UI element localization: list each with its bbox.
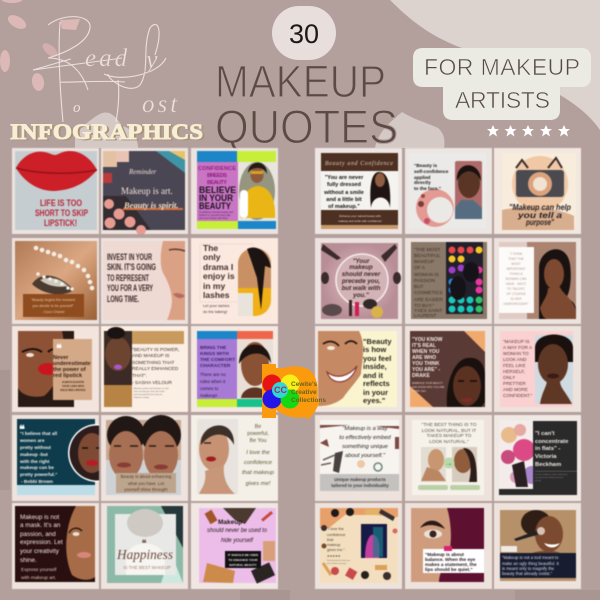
heading: Ready To Post script title: y bbox=[143, 45, 158, 74]
card: the best thing is to look natural: LOOK NATURAL." bbox=[429, 439, 469, 445]
card: believe in your beauty: Confidence breeds beauty and bbox=[199, 211, 234, 214]
card: pretty without makeup Bobbi Brown: women are bbox=[19, 438, 45, 443]
card: beauty is about enhancing what you have: what you have. Let bbox=[128, 481, 165, 486]
card: makeup should never be used to hide yourself: TO ENHANCE YOUR bbox=[228, 558, 258, 562]
card: you know it's real Drake: DRAKE bbox=[412, 373, 430, 379]
card: never underestimate the power of red lipstick: ALWAYS ELEVATE bbox=[62, 381, 84, 384]
card: beauty is how you feel inside: eyes." bbox=[363, 396, 386, 405]
card: makeup can help you tell a story: "Makeup can help bbox=[509, 203, 571, 212]
card: the best thing is to look natural: "THE BEST THING IS TO bbox=[422, 422, 477, 428]
card: invest in your skin: YOU FOR A VERY bbox=[107, 283, 153, 293]
card: beauty is how you feel inside: reflects bbox=[363, 379, 390, 388]
card: beauty is power: SOMETHING THAT bbox=[132, 360, 175, 366]
card: beauty and confidence: and a little bit bbox=[326, 197, 362, 203]
heading: INFOGRAPHICS: INFOGRAPHICS bbox=[10, 119, 203, 144]
card: I can't concentrate in flats Victoria Beckham bbox=[494, 414, 582, 502]
card: beauty is about enhancing what you have: Beauty is about enhancing bbox=[121, 474, 172, 479]
card: makeup is not a mask: expression. Let bbox=[20, 539, 63, 546]
card: makeup is a way for a woman: CONFIDENT." bbox=[503, 393, 533, 398]
card: beauty is how you feel inside: is how bbox=[363, 345, 387, 354]
card: bring the kings with the comfort of character: KINGS WITH bbox=[200, 351, 229, 357]
card: the best thing is to look natural: → bbox=[446, 460, 452, 468]
watermark logo: creative collections: Creative bbox=[291, 389, 317, 396]
card: beauty is how you feel inside: inside, bbox=[363, 362, 387, 371]
card: makeup is a way for a woman: HERSELF, bbox=[503, 369, 525, 374]
card: never underestimate the power of red lipstick: red lipstick bbox=[53, 373, 83, 379]
card: pretty without makeup Bobbi Brown: ❝ bbox=[19, 424, 25, 436]
card: the most beautiful makeup is passion: PASSION bbox=[414, 278, 436, 284]
card: your makeup should never precede you: but walk with bbox=[342, 285, 381, 292]
card: the most beautiful makeup is passion: BEAUTIFUL bbox=[414, 253, 441, 259]
card: believe in your beauty: BEAUTY bbox=[199, 201, 232, 212]
card: makeup is art: Beauty is spirit. bbox=[123, 200, 179, 210]
badge: 30 bbox=[272, 6, 336, 60]
card: beauty and confidence: makeup and smile with confidence! bbox=[338, 219, 382, 223]
card: makeup should never be used to hide yourself: IT SHOULD BE USED bbox=[228, 553, 259, 557]
card: the most beautiful makeup is passion: ARE EASIER bbox=[414, 297, 443, 303]
card: the most beautiful makeup is passion: MAKEUP bbox=[414, 259, 434, 265]
card: pretty without makeup Bobbi Brown: pretty powerful." bbox=[20, 472, 57, 477]
card: makeup is a way for a woman: A WAY FOR A bbox=[503, 345, 533, 350]
card: makeup can help you tell a story bbox=[494, 148, 582, 234]
card: woman with white quote panel: "I THINK bbox=[510, 252, 523, 256]
card: invest in your skin: INVEST IN YOUR bbox=[107, 252, 152, 262]
card: makeup is not a mask: shine. bbox=[20, 557, 37, 564]
card: happiness is the best makeup: ❝ bbox=[142, 538, 147, 548]
card: never underestimate the power of red lipstick: BOLD RED LIPSTICK bbox=[60, 389, 86, 392]
card: woman with white quote panel: HAVE - NEXT bbox=[506, 282, 526, 286]
card: beauty and confidence: Enhance your natural beauty with bbox=[339, 214, 381, 218]
card: the only drama I enjoy: Let your lashes bbox=[203, 303, 229, 308]
card: makeup is not a tool: "Makeup is not a tool meant to bbox=[502, 555, 559, 560]
card: bring the kings with the comfort of character: CHARACTER bbox=[200, 363, 231, 369]
card: beauty and confidence: without a smile bbox=[323, 190, 364, 196]
card: makeup is a way to effectively embed something unique: Unique makeup products bbox=[334, 477, 386, 482]
card: the most beautiful makeup is passion: LAURENT bbox=[414, 313, 436, 319]
card: beauty begins the moment: "Beauty begins the moment bbox=[31, 298, 75, 302]
card: makeup is a way for a woman: AND MORE bbox=[503, 387, 528, 392]
card: woman with white quote panel: THING A bbox=[509, 272, 523, 276]
card: you know it's real Drake: YOU ARE" - bbox=[412, 367, 440, 373]
card: I can't concentrate in flats Victoria Beckham: Let the confidence show and let your bbox=[535, 473, 568, 476]
card: I can't concentrate in flats Victoria Beckham: in flats" - bbox=[535, 446, 560, 452]
card: bring the kings with the comfort of character: comes to bbox=[200, 386, 219, 391]
card: you know it's real Drake: "YOU KNOW bbox=[412, 337, 443, 343]
card: you know it's real Drake: YOU THINK bbox=[412, 361, 440, 367]
card: you know it's real Drake: AND KNOW WHO YOU ARE bbox=[412, 386, 445, 389]
card: believe in your beauty: IN YOUR bbox=[199, 193, 233, 204]
card: makeup is not a tool: make an ugly thing beautiful. It bbox=[502, 561, 560, 566]
card: makeup is not a tool: is meant only to magnify the bbox=[502, 566, 555, 571]
card: be powerful, be you: I love the bbox=[246, 450, 271, 456]
card: the only drama I enjoy bbox=[190, 238, 278, 324]
card: makeup is a way to effectively embed something unique bbox=[314, 414, 402, 502]
card: beauty is self-confidence: to the face." bbox=[414, 186, 441, 191]
card: beauty and confidence: of makeup." bbox=[328, 204, 360, 210]
heading: INFOGRAPHICS: INFOGRAPHICS bbox=[12, 120, 205, 145]
card: life is too short to skip lipstick: LIPSTICK! bbox=[44, 218, 77, 228]
card: believe in your beauty: CONFIDENCE bbox=[198, 166, 236, 172]
card: the most beautiful makeup is passion bbox=[404, 238, 492, 324]
card: beauty is self-confidence: directly bbox=[414, 180, 431, 185]
card: believe in your beauty: and your beauty will shine bbox=[199, 217, 228, 220]
heading: Ready To Post script title bbox=[10, 16, 205, 145]
card: beauty begins the moment bbox=[12, 238, 100, 324]
card: I can't concentrate in flats Victoria Beckham: you go. bbox=[535, 480, 542, 482]
card: beauty is how you feel inside: you feel bbox=[363, 354, 391, 363]
watermark logo: creative collections: Collections bbox=[291, 397, 326, 404]
card: happiness is the best makeup: Happiness bbox=[116, 548, 174, 563]
card: I love the confidence: "I love the bbox=[327, 527, 344, 531]
card: beauty is power: - SASHA VELOUR bbox=[132, 380, 173, 386]
card: makeup is about balance: lips should be quiet." bbox=[425, 567, 473, 572]
card: you know it's real Drake: EMBRACE YOUR BEAUTY bbox=[412, 382, 443, 385]
card: never underestimate the power of red lipstick: ❝ bbox=[56, 343, 62, 355]
card: beauty is how you feel inside bbox=[314, 326, 402, 412]
card: you know it's real Drake: EVERY DAY. bbox=[412, 390, 427, 393]
watermark logo: creative collections bbox=[262, 364, 326, 420]
card: bring the kings with the comfort of character: makeup! bbox=[200, 393, 217, 398]
badge: 30: 30 bbox=[289, 19, 319, 49]
card: the most beautiful makeup is passion: OF A bbox=[414, 265, 426, 271]
card: be powerful, be you: powerful, bbox=[247, 431, 269, 437]
card: makeup is art: Makeup is art. bbox=[121, 186, 173, 196]
card: happiness is the best makeup bbox=[100, 502, 188, 590]
label: For Makeup Artists: FOR MAKEUP bbox=[424, 54, 580, 80]
card: never underestimate the power of red lipstick: the power of bbox=[53, 367, 86, 373]
card: pretty without makeup Bobbi Brown bbox=[12, 414, 100, 502]
card: pretty without makeup Bobbi Brown: makeup -but bbox=[20, 452, 48, 457]
card: makeup is a way for a woman: "MAKEUP IS bbox=[503, 339, 530, 344]
card: the best thing is to look natural: TAKES MAKEUP TO bbox=[427, 433, 472, 439]
card: makeup is not a mask bbox=[12, 502, 100, 590]
heading: Ready To Post script title: ead bbox=[85, 45, 130, 72]
card: I love the confidence: makeup bbox=[327, 543, 341, 547]
card: beauty is power: AND MAKEUP IS bbox=[132, 353, 170, 359]
card: be powerful, be you: gives me! bbox=[246, 481, 271, 487]
card: the only drama I enjoy: in my bbox=[203, 281, 225, 291]
card: the most beautiful makeup is passion: YVES SAINT bbox=[414, 308, 442, 314]
card: pretty without makeup Bobbi Brown: makeup can be bbox=[20, 465, 54, 470]
card: the only drama I enjoy: drama I bbox=[203, 262, 233, 272]
card: bring the kings with the comfort of character: There are no bbox=[200, 372, 226, 377]
card: makeup is a way to effectively embed something unique: something unique bbox=[342, 444, 389, 450]
card: beauty and confidence: fully dressed bbox=[327, 182, 361, 188]
card: beauty is about enhancing what you have bbox=[100, 414, 188, 502]
card: invest in your skin bbox=[100, 238, 188, 324]
card: you know it's real Drake bbox=[404, 326, 492, 412]
card: makeup is not a tool bbox=[494, 502, 582, 590]
card: beauty is power: THAT". bbox=[132, 373, 147, 379]
card: believe in your beauty: BREEDS bbox=[207, 173, 227, 179]
card: beauty is power: "BEAUTY IS POWER, bbox=[132, 347, 179, 353]
card: woman with white quote panel: OF COURSE bbox=[506, 292, 527, 296]
card: makeup is a way for a woman bbox=[494, 326, 582, 412]
card: bring the kings with the comfort of character: THE COMFORT bbox=[200, 357, 235, 363]
heading: MAKEUP QUOTES bbox=[215, 56, 398, 150]
card: makeup is a way for a woman: ONLY bbox=[503, 375, 515, 380]
card: beauty is about enhancing what you have: yourself shine through! bbox=[124, 487, 168, 492]
card: I love the confidence bbox=[314, 502, 402, 590]
card: beauty is power: Beauty is power and makeup is a tool bbox=[134, 387, 169, 390]
card: beauty and confidence: Beauty and Confidence bbox=[325, 160, 393, 167]
card: the most beautiful makeup is passion: "THE MOST bbox=[414, 247, 441, 253]
card: I can't concentrate in flats Victoria Beckham: "I can't bbox=[535, 431, 555, 437]
card: beauty is power: Embrace it daily. bbox=[134, 396, 150, 399]
card: woman with white quote panel: TO TALENT, bbox=[507, 287, 525, 291]
card: the only drama I enjoy: only bbox=[203, 252, 221, 262]
card: makeup is a way for a woman: FEEL LIKE bbox=[503, 363, 526, 368]
card: be powerful, be you bbox=[190, 414, 278, 502]
card: makeup is not a mask: Express yourself bbox=[21, 567, 57, 573]
heading: MAKEUP QUOTES: MAKEUP bbox=[215, 56, 386, 107]
card: makeup is a way for a woman: LOOK AND bbox=[503, 357, 527, 362]
heading: Ready To Post script title: ost bbox=[142, 91, 180, 118]
card: the most beautiful makeup is passion: COSMETICS bbox=[414, 290, 443, 296]
card: the most beautiful makeup is passion: WOMAN IS bbox=[414, 272, 439, 278]
heading: Ready To Post script title: o bbox=[73, 100, 81, 116]
card: I love the confidence: confidence bbox=[327, 533, 345, 537]
card: makeup is a way to effectively embed something unique: to effectively embed bbox=[339, 435, 392, 441]
watermark logo: creative collections: CC bbox=[274, 385, 287, 395]
card: the only drama I enjoy: do the talking! bbox=[203, 309, 227, 314]
card: believe in your beauty: believe in yourself every day bbox=[199, 214, 231, 217]
card: woman with white quote panel: IMPORTANT bbox=[506, 267, 526, 271]
card: the best thing is to look natural: LOOK NATURAL, BUT IT bbox=[422, 428, 476, 434]
card: I love the confidence: that bbox=[327, 538, 334, 542]
card: beauty and confidence: "You are never bbox=[325, 175, 364, 181]
card: you know it's real Drake: ARE WHO bbox=[412, 355, 436, 361]
card: your makeup should never precede you bbox=[314, 238, 402, 324]
card: be powerful, be you: Be You bbox=[250, 438, 266, 444]
card: invest in your skin: LONG TIME. bbox=[107, 294, 139, 304]
card: makeup can help you tell a story: you tell a bbox=[517, 211, 563, 220]
card: beauty and confidence bbox=[314, 148, 402, 234]
card: pretty without makeup Bobbi Brown: "I believe that all bbox=[20, 431, 57, 436]
card: makeup should never be used to hide yourself bbox=[190, 502, 278, 590]
card: woman with white quote panel: THAT THE bbox=[508, 257, 525, 261]
card: the only drama I enjoy: lashes bbox=[203, 290, 230, 300]
card: your makeup should never precede you: precede you, bbox=[341, 278, 380, 285]
card: be powerful, be you: that makeup bbox=[242, 470, 275, 476]
card: beauty is self-confidence: applied bbox=[414, 175, 431, 180]
card: your makeup should never precede you: should never bbox=[342, 271, 381, 278]
card: beauty begins the moment: you decide to be yourself" bbox=[32, 304, 74, 308]
card: bring the kings with the comfort of character bbox=[190, 326, 278, 412]
card: I love the confidence: ★★★★★ bbox=[327, 554, 341, 558]
card: bring the kings with the comfort of character: BRING THE bbox=[200, 345, 227, 351]
card: be powerful, be you: Be bbox=[255, 424, 261, 430]
card: never underestimate the power of red lipstick: underestimate bbox=[53, 361, 91, 367]
card: makeup is about balance: "Makeup is about bbox=[425, 552, 464, 557]
card: makeup is a way for a woman: PRETTIER bbox=[503, 381, 526, 386]
card: I love the confidence: feel confident every day. bbox=[327, 562, 347, 565]
card: woman with white quote panel: WOMAN CAN bbox=[506, 277, 527, 281]
card: pretty without makeup Bobbi Brown: with the right bbox=[19, 459, 50, 464]
card: the only drama I enjoy: The bbox=[203, 243, 218, 253]
card: life is too short to skip lipstick: LIFE IS TOO bbox=[40, 198, 82, 208]
card: beauty is power: just how powerful you truly are. bbox=[133, 393, 163, 396]
card: makeup is about balance: makes a statement, the bbox=[425, 562, 477, 567]
card: I can't concentrate in flats Victoria Beckham: Beckham bbox=[535, 462, 561, 468]
card: woman with white quote panel: MOST bbox=[511, 262, 521, 266]
card: makeup is about balance bbox=[404, 502, 492, 590]
card: makeup is not a mask: passion, and bbox=[20, 531, 56, 538]
card: the best thing is to look natural bbox=[404, 414, 492, 502]
watermark logo: creative collections: Cewite's bbox=[291, 381, 317, 388]
card: beauty begins the moment: - Coco Chanel bbox=[42, 310, 65, 314]
card: you know it's real Drake: IT'S REAL bbox=[412, 343, 436, 349]
card: the only drama I enjoy: enjoy is bbox=[203, 271, 235, 281]
card: believe in your beauty: BELIEVE bbox=[199, 185, 236, 196]
card: makeup is art: Reminder bbox=[128, 168, 156, 176]
card: your makeup should never precede you: "Your bbox=[353, 258, 370, 265]
card: makeup is a way to effectively embed something unique: "Makeup is a way bbox=[342, 426, 389, 432]
icon: five star rating bbox=[487, 125, 570, 136]
card: beauty is how you feel inside: "Beauty bbox=[363, 337, 392, 346]
card: happiness is the best makeup: IS THE BEST MAKEUP bbox=[123, 565, 171, 570]
label: For Makeup Artists bbox=[413, 48, 591, 120]
card: I love the confidence: Find makeup that makes you bbox=[327, 559, 350, 562]
card: beauty is power: that can help you show the world bbox=[134, 390, 165, 393]
card: beauty is how you feel inside: and it bbox=[363, 371, 384, 380]
card: makeup is a way to effectively embed something unique: tailored to your individuality bbox=[331, 483, 389, 488]
card: makeup should never be used to hide yourself: should never be used to bbox=[207, 527, 267, 534]
card: woman with white quote panel: HAIRDRESSER" bbox=[504, 302, 529, 306]
card: the most beautiful makeup is passion: TO BUY." bbox=[414, 303, 434, 309]
card: believe in your beauty: BEAUTY bbox=[207, 180, 227, 186]
card: makeup should never be used to hide yourself: hide yourself bbox=[221, 537, 254, 544]
card: your makeup should never precede you: you." bbox=[352, 292, 369, 299]
card: never underestimate the power of red lipstick: YOUR LOOK WITH bbox=[62, 385, 84, 388]
card: beauty is self-confidence: self-confidence bbox=[414, 169, 449, 174]
card: makeup is a way to effectively embed something unique: about yourself." bbox=[345, 453, 386, 459]
card: beauty is how you feel inside: in your bbox=[363, 388, 388, 397]
card: I love the confidence: gives me." bbox=[327, 548, 345, 552]
card: makeup is not a mask: your creativity bbox=[20, 548, 60, 555]
card: beauty is self-confidence bbox=[404, 148, 492, 234]
card: beauty is power: REALLY ENHANCED bbox=[132, 366, 179, 372]
card: never underestimate the power of red lipstick: Never bbox=[53, 355, 69, 361]
card: beauty is power bbox=[100, 326, 188, 412]
card: life is too short to skip lipstick bbox=[12, 148, 100, 234]
card: pretty without makeup Bobbi Brown: - Bobbi Brown bbox=[21, 479, 53, 484]
card: I can't concentrate in flats Victoria Beckham: makeup do the talking wherever bbox=[535, 476, 564, 479]
card: be powerful, be you: confidence bbox=[244, 460, 273, 466]
card: you know it's real Drake: WHEN YOU bbox=[412, 349, 440, 355]
label: For Makeup Artists: ARTISTS bbox=[455, 87, 550, 113]
card: makeup is art bbox=[100, 148, 188, 234]
card: makeup is not a mask: Makeup is not bbox=[20, 514, 59, 521]
card: I can't concentrate in flats Victoria Beckham: Victoria bbox=[535, 454, 557, 460]
card: makeup can help you tell a story: purpose" bbox=[525, 218, 554, 227]
card: believe in your beauty bbox=[190, 147, 278, 234]
card: I can't concentrate in flats Victoria Beckham: concentrate bbox=[535, 439, 569, 445]
card: bring the kings with the comfort of character: rules when it bbox=[200, 379, 226, 384]
card: makeup is about balance: balance. When the eye bbox=[425, 557, 476, 562]
card: makeup is not a tool: beauty that already exists." bbox=[502, 571, 553, 576]
card: beauty is self-confidence: "Beauty is bbox=[414, 163, 437, 168]
card: makeup is not a mask: a mask. It's an bbox=[20, 522, 61, 529]
card: makeup is not a mask: with makeup art. bbox=[21, 575, 56, 581]
card: never underestimate the power of red lipstick bbox=[12, 326, 100, 412]
card: makeup should never be used to hide yourself: NATURAL BEAUTY bbox=[229, 563, 257, 567]
card: invest in your skin: SKIN. IT'S GOING bbox=[107, 262, 156, 272]
card: pretty without makeup Bobbi Brown: pretty without bbox=[20, 445, 51, 450]
card: your makeup should never precede you: makeup bbox=[349, 264, 373, 271]
card: invest in your skin: TO REPRESENT bbox=[107, 273, 149, 283]
card: makeup should never be used to hide yourself: Makeup bbox=[218, 519, 242, 526]
card: woman with white quote panel: IS HER bbox=[510, 297, 522, 301]
card: woman with white quote panel bbox=[494, 238, 582, 324]
card: the most beautiful makeup is passion: BUT bbox=[414, 284, 424, 290]
card: makeup is a way for a woman: WOMAN TO bbox=[503, 351, 529, 356]
